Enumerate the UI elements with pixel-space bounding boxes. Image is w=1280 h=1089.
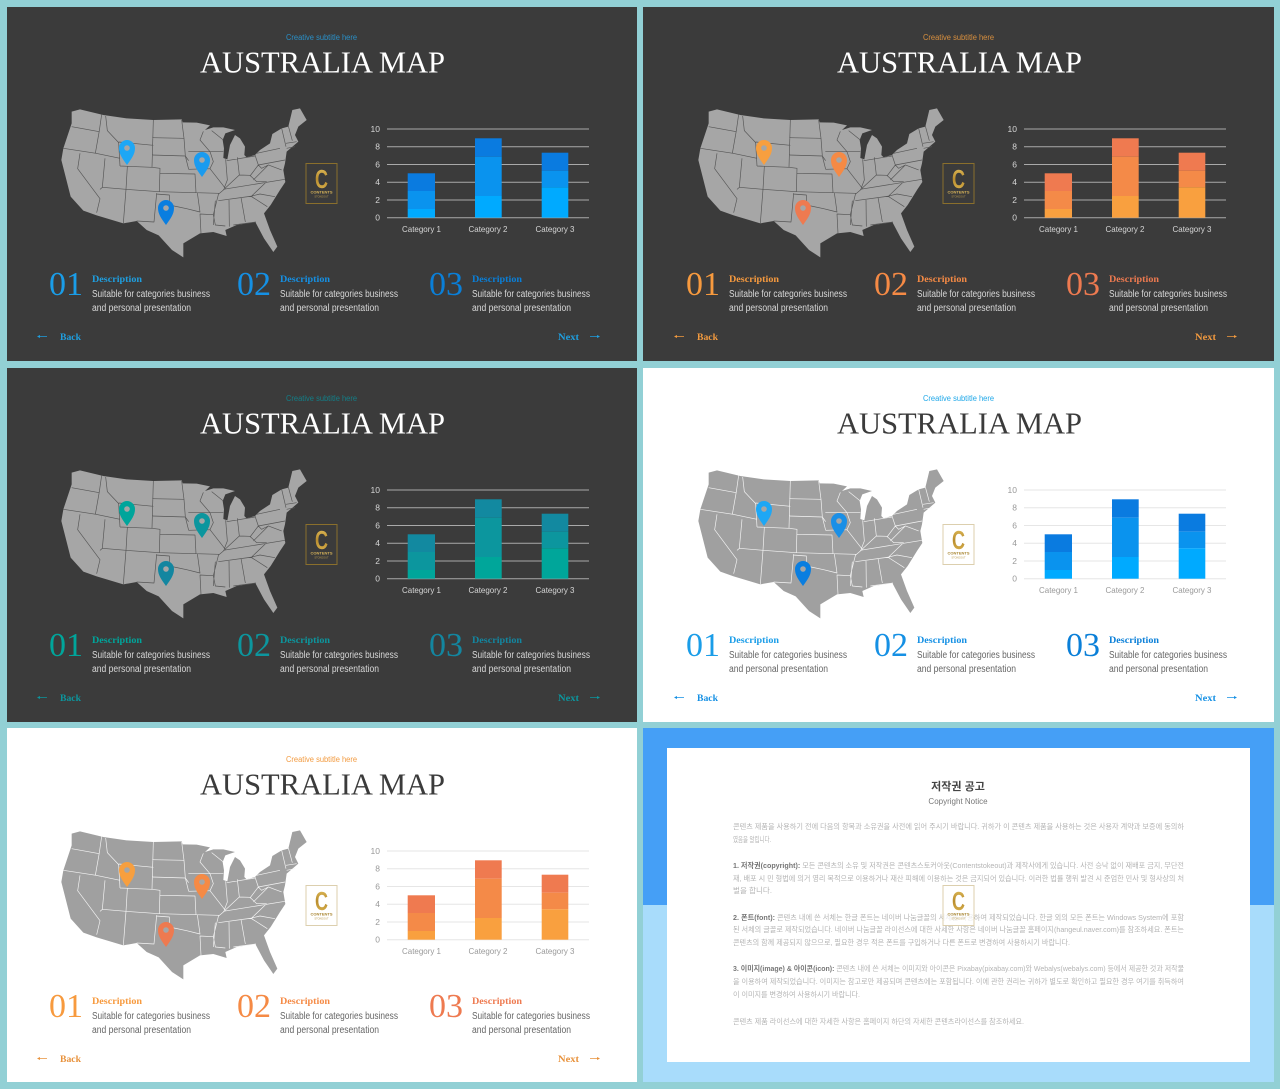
- title: AUSTRALIA MAP: [837, 406, 1082, 440]
- item 02: and personal presentation: [917, 664, 1016, 675]
- logo: STOKEOUT: [314, 916, 329, 920]
- logo: C: [952, 525, 965, 555]
- item 02: Description: [280, 636, 331, 646]
- item 01: [49, 988, 210, 1036]
- bar chart: [1008, 485, 1226, 595]
- logo: CONTENTS: [310, 190, 333, 194]
- item 01: [49, 266, 210, 314]
- item 01: and personal presentation: [92, 664, 191, 675]
- bar: category 1: [408, 173, 435, 218]
- notice subheading: Copyright Notice: [928, 797, 988, 806]
- item 02: Description: [917, 275, 968, 285]
- pin 3: [158, 561, 174, 586]
- subtitle: Creative subtitle here: [286, 33, 358, 42]
- item 02: Description: [280, 997, 331, 1007]
- axis labels: 6: [375, 882, 380, 892]
- item 02: [237, 627, 398, 675]
- axis labels: 10: [1008, 124, 1017, 134]
- bar: category 1: [1045, 534, 1072, 579]
- item 02: 02: [237, 627, 271, 664]
- map: [61, 830, 307, 979]
- item 01: and personal presentation: [729, 303, 828, 314]
- title: AUSTRALIA MAP: [200, 406, 445, 440]
- item 01: [49, 627, 210, 675]
- bar chart: [371, 846, 589, 956]
- axis labels: [1008, 124, 1212, 234]
- axis labels: 6: [1012, 520, 1017, 530]
- item 01: and personal presentation: [92, 303, 191, 314]
- next link: [1195, 333, 1237, 343]
- notice body text: 3. 이미지(image) & 아이콘(icon): 콘텐츠 내에 쓴 서체는 이미지와 아이콘은 Pixabay(pixabay.com)와 Webalys(webalys.com) 등에서 제공한 것과 저작물: [733, 964, 1184, 973]
- item 02: and personal presentation: [280, 1025, 379, 1036]
- item 03: Suitable for categories business: [1109, 650, 1227, 661]
- axis labels: Category 2: [1106, 224, 1145, 234]
- back link: Back: [60, 333, 82, 343]
- next link: Next: [558, 694, 580, 704]
- item 03: and personal presentation: [472, 303, 571, 314]
- item 03: [1066, 627, 1227, 675]
- item 02: and personal presentation: [280, 303, 379, 314]
- bar: category 2: [475, 499, 502, 579]
- item 01: Description: [92, 997, 143, 1007]
- item 03: Description: [472, 636, 523, 646]
- axis labels: 6: [375, 520, 380, 530]
- slide 2: dark orange: [643, 7, 1274, 361]
- subtitle: Creative subtitle here: [286, 394, 358, 403]
- next link: [558, 1055, 600, 1065]
- map: [698, 469, 944, 618]
- pin 1: [119, 862, 135, 887]
- axis labels: 2: [375, 917, 380, 927]
- logo: STOKEOUT: [951, 194, 966, 198]
- notice body text: 이 이미지를 변경하여 사용하시기 바랍니다.: [733, 990, 860, 999]
- notice body text: 벌을 합니다.: [733, 886, 772, 895]
- item 01: Description: [729, 275, 780, 285]
- next link: Next: [1195, 694, 1217, 704]
- axis labels: 2: [375, 195, 380, 205]
- item 01: [686, 627, 847, 675]
- notice body text: 였음을 알립니다.: [733, 835, 771, 844]
- item 03: [429, 266, 590, 314]
- item 02: Suitable for categories business: [917, 650, 1035, 661]
- back link: [37, 333, 82, 343]
- item 01: Suitable for categories business: [729, 650, 847, 661]
- map: [61, 108, 307, 257]
- axis labels: [371, 846, 575, 956]
- item 03: Description: [472, 275, 523, 285]
- axis labels: Category 2: [468, 946, 508, 956]
- back link: Back: [697, 333, 719, 343]
- item 03: 03: [429, 266, 463, 303]
- item 03: Suitable for categories business: [472, 1011, 590, 1022]
- pin 1: [119, 140, 135, 165]
- item 02: Suitable for categories business: [917, 289, 1035, 300]
- pin 2: [831, 513, 847, 538]
- notice body text: 된 서체의 글꼴로 제작되었습니다. 네이버 나눔글꼴 라이선스에 대한 사세한 사항은 네이버 나눔글꼴 홈페이지(hangeul.naver.com)를 참조하세요. 폰트는: [733, 925, 1184, 934]
- axis labels: Category 3: [536, 946, 575, 956]
- bar: category 2: [1112, 499, 1139, 579]
- item 02: [237, 988, 398, 1036]
- pin 2: [831, 152, 847, 177]
- axis labels: 4: [375, 899, 380, 909]
- pin 3: [158, 922, 174, 947]
- item 03: and personal presentation: [1109, 303, 1208, 314]
- axis labels: [1008, 485, 1212, 595]
- axis labels: 4: [1012, 538, 1017, 548]
- subtitle: Creative subtitle here: [923, 394, 995, 403]
- slide 5: light orange: [7, 728, 637, 1082]
- subtitle: Creative subtitle here: [286, 755, 358, 764]
- map: [61, 469, 307, 618]
- next link: Next: [558, 1055, 580, 1065]
- title: AUSTRALIA MAP: [837, 44, 1082, 80]
- item 01: 01: [49, 988, 83, 1025]
- back link: [674, 333, 719, 343]
- back link: Back: [60, 694, 82, 704]
- item 02: Suitable for categories business: [280, 289, 398, 300]
- notice body text: 콘텐츠의 함께 제공되지 않으므로, 필요한 경우 적은 폰트를 구입하거나 다른 폰트로 변경하여 사용하시기 바랍니다.: [733, 938, 1070, 947]
- axis labels: 10: [371, 485, 380, 495]
- axis labels: 4: [1012, 177, 1017, 187]
- logo: CONTENTS: [948, 550, 970, 556]
- axis labels: 10: [1008, 485, 1017, 495]
- item 01: 01: [49, 266, 83, 303]
- item 02: 02: [237, 266, 271, 303]
- item 02: Description: [280, 275, 331, 285]
- item 02: 02: [874, 627, 908, 664]
- next link: Next: [558, 333, 580, 343]
- logo: STOKEOUT: [314, 556, 329, 560]
- item 03: 03: [1066, 627, 1100, 664]
- item 03: [429, 627, 590, 675]
- logo: C: [315, 886, 328, 916]
- axis labels: [371, 485, 575, 595]
- item 02: 02: [874, 266, 908, 303]
- axis labels: 2: [1012, 195, 1017, 205]
- bar: category 2: [475, 138, 502, 218]
- axis labels: 8: [1012, 503, 1017, 513]
- item 02: and personal presentation: [917, 303, 1016, 314]
- axis labels: Category 2: [1106, 585, 1145, 595]
- axis labels: 0: [375, 213, 380, 223]
- axis labels: Category 3: [536, 585, 575, 595]
- next link: [1195, 694, 1237, 704]
- notice body text: 1. 저작권(copyright): 모든 콘텐츠의 소유 및 저작권은 콘텐츠스토커아웃(Contentstokeout)과 제작사에게 있습니다. 사전 승낙 없이 재배포 금지, 무단전: [733, 861, 1184, 870]
- axis labels: Category 1: [1039, 585, 1078, 595]
- slide 6: copyright notice: [643, 728, 1274, 1082]
- axis labels: 2: [375, 556, 380, 566]
- back link: Back: [697, 694, 719, 704]
- next link: [558, 333, 600, 343]
- item 02: 02: [237, 988, 271, 1025]
- back link: Back: [60, 1055, 82, 1065]
- pin 3: [795, 561, 811, 586]
- item 02: [874, 266, 1035, 314]
- back link: [37, 694, 82, 704]
- item 01: and personal presentation: [92, 1025, 191, 1036]
- item 03: 03: [429, 988, 463, 1025]
- axis labels: 4: [375, 177, 380, 187]
- pin 2: [194, 152, 210, 177]
- map: [698, 108, 944, 257]
- logo overlay: [943, 886, 974, 926]
- notice heading: 저작권 공고: [931, 779, 985, 793]
- axis labels: 8: [375, 503, 380, 513]
- back link: [37, 1055, 82, 1065]
- item 02: Description: [917, 636, 968, 646]
- next link: [558, 694, 600, 704]
- item 03: and personal presentation: [472, 664, 571, 675]
- bar: category 2: [475, 860, 502, 940]
- axis labels: Category 1: [402, 224, 441, 234]
- notice body text: [733, 822, 1184, 1026]
- logo: CONTENTS: [310, 550, 333, 556]
- logo: STOKEOUT: [951, 556, 966, 560]
- item 03: Description: [1109, 275, 1160, 285]
- bar chart: [1008, 124, 1226, 234]
- logo: C: [315, 525, 328, 555]
- item 02: [237, 266, 398, 314]
- pin 2: [194, 513, 210, 538]
- axis labels: Category 1: [402, 946, 441, 956]
- slide 3: dark teal: [7, 368, 637, 722]
- bar: category 1: [1045, 173, 1072, 218]
- logo: CONTENTS: [948, 190, 970, 194]
- item 01: Suitable for categories business: [729, 289, 847, 300]
- notice body text: 재, 배포 시 민 형법에 의거 영리 목적으로 이용하거나 재산 피해에 이용하는 것은 금지되어 있습니다. 이러한 법률 행위 발견 시 준엄한 민사 및 형사상의 처: [733, 874, 1184, 883]
- logo: STOKEOUT: [314, 194, 329, 198]
- bar: category 1: [408, 895, 435, 940]
- item 02: Suitable for categories business: [280, 1011, 398, 1022]
- bar chart: [371, 485, 589, 595]
- logo: CONTENTS: [310, 912, 333, 916]
- logo: [306, 524, 337, 564]
- pin 1: [756, 140, 772, 165]
- item 01: 01: [686, 627, 720, 664]
- back link: [674, 694, 719, 704]
- white notice panel: [667, 748, 1250, 1062]
- bar chart: [371, 124, 589, 234]
- logo overlay: STOKEOUT: [951, 916, 966, 920]
- item 03: 03: [1066, 266, 1100, 303]
- bar: category 2: [1112, 138, 1139, 218]
- bar: category 3: [1179, 514, 1205, 579]
- axis labels: Category 2: [468, 585, 508, 595]
- pin 3: [158, 200, 174, 225]
- item 03: Description: [1109, 636, 1160, 646]
- bar: category 1: [408, 534, 435, 579]
- logo: C: [952, 164, 965, 194]
- item 03: and personal presentation: [472, 1025, 571, 1036]
- axis labels: Category 1: [402, 585, 441, 595]
- bar: category 3: [542, 153, 568, 218]
- item 03: Suitable for categories business: [472, 650, 590, 661]
- title: AUSTRALIA MAP: [200, 766, 445, 802]
- item 01: [686, 266, 847, 314]
- title: AUSTRALIA MAP: [200, 44, 445, 80]
- axis labels: Category 1: [1039, 224, 1078, 234]
- item 01: Suitable for categories business: [92, 1011, 210, 1022]
- logo: [306, 164, 337, 204]
- axis labels: 2: [1012, 556, 1017, 566]
- bar: category 3: [542, 875, 568, 940]
- notice body text: 2. 폰트(font): 콘텐츠 내에 쓴 서체는 한글 폰트는 네이버 나눔글꼴의 서체를 사용하여 제작되었습니다. 한글 외의 모든 폰트는 Windows System에 포함: [733, 913, 1184, 922]
- axis labels: 8: [375, 864, 380, 874]
- logo: C: [315, 164, 328, 194]
- logo overlay: C: [952, 886, 965, 916]
- axis labels: 10: [371, 124, 380, 134]
- item 01: Description: [92, 636, 143, 646]
- item 01: Suitable for categories business: [92, 289, 210, 300]
- item 03: and personal presentation: [1109, 664, 1208, 675]
- pin 1: [756, 501, 772, 526]
- axis labels: Category 2: [468, 224, 508, 234]
- item 03: [429, 988, 590, 1036]
- axis labels: [371, 124, 575, 234]
- axis labels: 8: [375, 142, 380, 152]
- logo overlay: CONTENTS: [948, 912, 970, 916]
- logo: [943, 524, 974, 564]
- slide 4: light blue: [643, 368, 1274, 722]
- axis labels: 6: [375, 160, 380, 170]
- item 03: Suitable for categories business: [472, 289, 590, 300]
- axis labels: 10: [371, 846, 380, 856]
- logo: [943, 164, 974, 204]
- item 03: Description: [472, 997, 523, 1007]
- axis labels: 0: [1012, 213, 1017, 223]
- notice body text: 을 이용하여 제작되었습니다. 이미지는 참고로만 제공되며 콘텐츠에는 포함됩니다. 이에 관한 권리는 귀하가 별도로 확인하고 필요한 경우 여기를 취득하여: [733, 977, 1184, 986]
- axis labels: Category 3: [536, 224, 575, 234]
- next link: Next: [1195, 333, 1217, 343]
- axis labels: 4: [375, 538, 380, 548]
- item 01: and personal presentation: [729, 664, 828, 675]
- item 03: 03: [429, 627, 463, 664]
- item 03: [1066, 266, 1227, 314]
- item 02: [874, 627, 1035, 675]
- bar: category 3: [542, 514, 568, 579]
- subtitle: Creative subtitle here: [923, 33, 995, 42]
- axis labels: 0: [375, 935, 380, 945]
- notice body text: 콘텐츠 제품을 사용하기 전에 다음의 항목과 소유권을 사전에 읽어 주시기 바랍니다. 귀하가 이 콘텐츠 제품을 사용하는 것은 사용자 계약과 보증에 동의하: [733, 822, 1184, 831]
- item 01: 01: [49, 627, 83, 664]
- pin 1: [119, 501, 135, 526]
- bar: category 3: [1179, 153, 1205, 218]
- item 01: 01: [686, 266, 720, 303]
- slide 1: dark blue: [7, 7, 637, 361]
- axis labels: 8: [1012, 142, 1017, 152]
- axis labels: 0: [375, 574, 380, 584]
- axis labels: 6: [1012, 160, 1017, 170]
- pin 2: [194, 874, 210, 899]
- item 02: Suitable for categories business: [280, 650, 398, 661]
- axis labels: 0: [1012, 574, 1017, 584]
- pin 3: [795, 200, 811, 225]
- item 01: Suitable for categories business: [92, 650, 210, 661]
- item 03: Suitable for categories business: [1109, 289, 1227, 300]
- item 01: Description: [92, 275, 143, 285]
- logo: [306, 886, 337, 926]
- notice body text: 콘텐츠 제품 라이선스에 대한 자세한 사항은 홈페이지 하단의 자세한 콘텐츠라이선스를 참조하세요.: [733, 1017, 1024, 1026]
- item 01: Description: [729, 636, 780, 646]
- item 02: and personal presentation: [280, 664, 379, 675]
- axis labels: Category 3: [1172, 585, 1212, 595]
- axis labels: Category 3: [1172, 224, 1212, 234]
